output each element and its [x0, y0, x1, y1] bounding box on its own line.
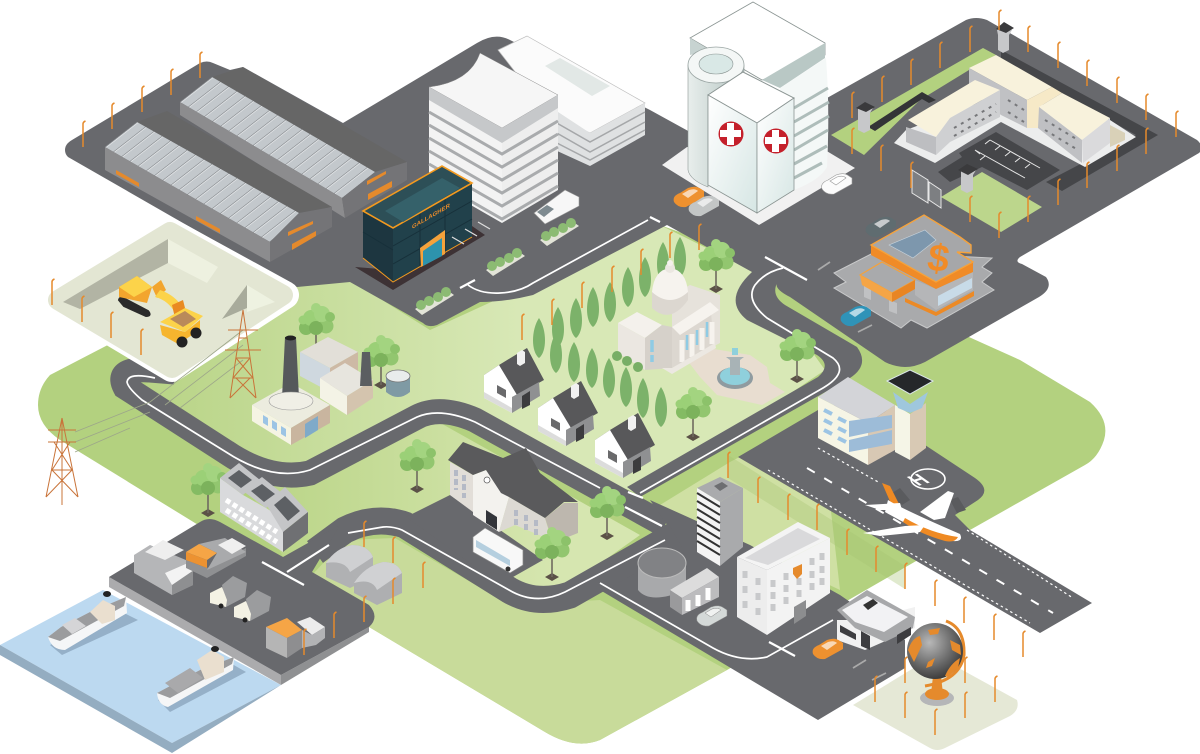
trucks: [210, 576, 271, 622]
cars near hospital: [674, 174, 852, 216]
low pump house: [670, 568, 719, 615]
glass headquarters: GALLAGHER: [412, 202, 450, 231]
quonset sheds: [326, 545, 402, 605]
water: harbour: [0, 590, 281, 753]
ground: lawn between roads: [240, 420, 640, 592]
kiosk: [837, 590, 915, 650]
ground: south-east lawn: [660, 415, 840, 590]
bank: $: [925, 236, 952, 281]
control tower: [887, 370, 933, 460]
cars at bank: [841, 217, 896, 326]
ships: [48, 591, 246, 712]
airport terminal: [818, 377, 895, 465]
mining site: [58, 232, 285, 368]
warehouse: front: [105, 111, 332, 262]
fence at airport: [728, 455, 905, 589]
ground: southern lawn: [312, 538, 727, 744]
pylon right: [225, 310, 261, 398]
cars lower: [697, 606, 843, 659]
glass headquarters: [355, 166, 485, 290]
warehouse: back: [180, 67, 407, 218]
trees: [190, 239, 816, 517]
planters: [415, 218, 579, 315]
office tower: [429, 53, 558, 223]
houses: [484, 348, 655, 478]
parking stripes: [452, 222, 490, 244]
globe: [907, 621, 964, 706]
power plant: [252, 336, 410, 445]
solar factory: [220, 463, 308, 552]
ground: central lawn: [130, 225, 825, 495]
prison complex: [831, 22, 1158, 232]
cypress rows: [533, 237, 686, 427]
trees in front of school: [534, 486, 626, 581]
road: school yard: [406, 495, 543, 577]
road markings: [127, 217, 1073, 680]
school: [448, 442, 578, 543]
capitol building: [612, 260, 720, 374]
cylindrical tank: [638, 548, 686, 598]
helipad: [902, 469, 945, 489]
bus: [473, 528, 523, 573]
road: south curve: [315, 521, 675, 599]
road: airport apron and runway: [738, 395, 1092, 633]
plaza with fountain: [687, 348, 785, 405]
port quay: [109, 519, 374, 685]
airplane: [863, 483, 966, 542]
helipad: H: [902, 471, 935, 489]
striped tower: [697, 477, 743, 566]
van: [534, 190, 579, 224]
globe plinth pad: [853, 655, 1018, 750]
port containers: [134, 538, 325, 658]
ground: green land: [38, 225, 1105, 744]
bank: [834, 215, 994, 328]
road network: northern district: [65, 18, 1200, 497]
pylon left: [46, 418, 78, 505]
road: lower junction: [600, 500, 905, 720]
road: loop through town: [123, 370, 665, 525]
hotel: [737, 522, 830, 635]
low rise building behind office tower: [498, 36, 645, 166]
hospital: [662, 2, 855, 225]
power lines: [75, 330, 243, 452]
